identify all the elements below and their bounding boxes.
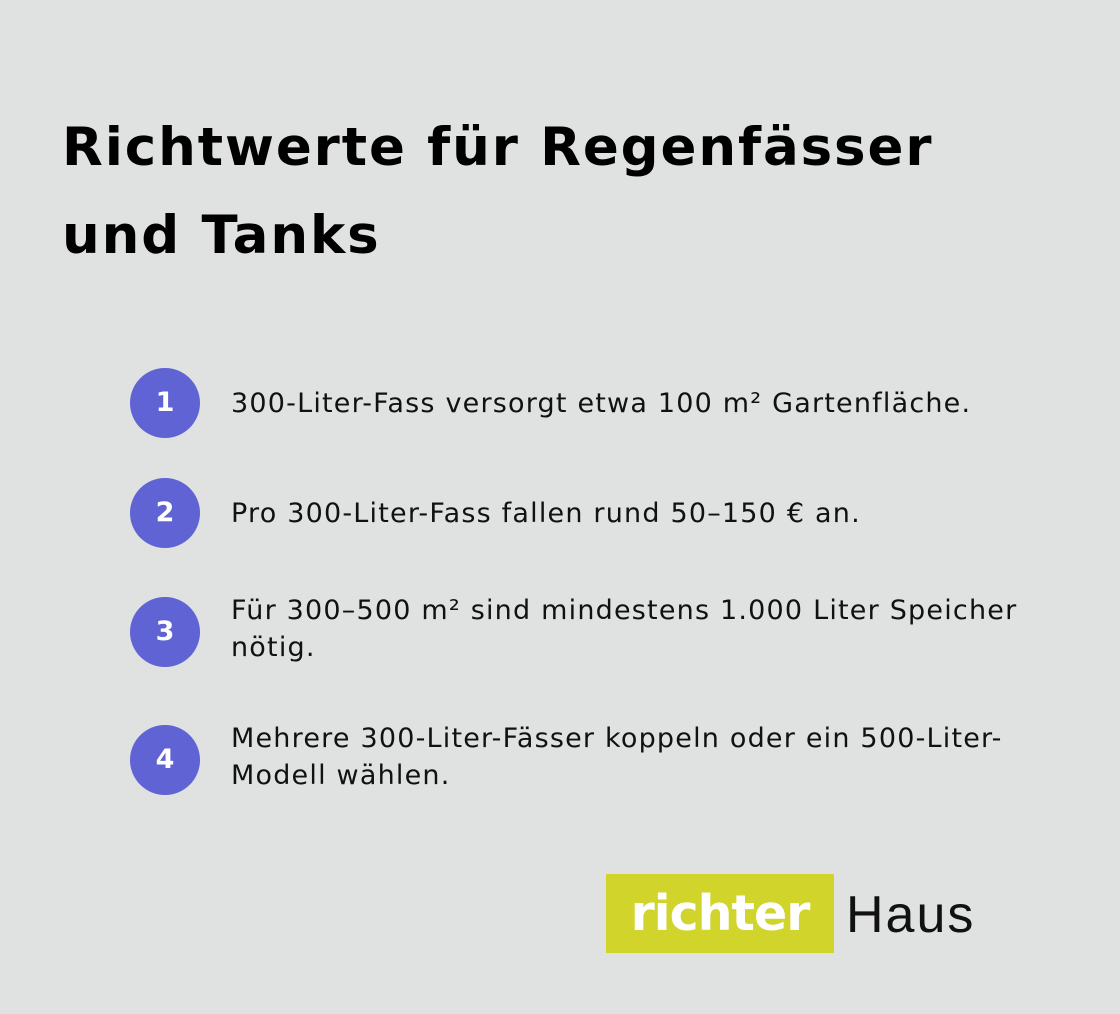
icon: number 4: 4 xyxy=(156,744,174,775)
title: Richtwerte für Regenfässer xyxy=(62,117,933,178)
icon: number 3 xyxy=(130,597,200,667)
item 2 xyxy=(130,478,861,548)
title: und Tanks xyxy=(62,205,381,266)
item 1 xyxy=(130,368,971,438)
item 3 xyxy=(130,595,1017,667)
icon: number 2: 2 xyxy=(156,497,174,528)
icon: number 4 xyxy=(130,725,200,795)
title xyxy=(62,117,933,266)
item 3: Für 300–500 m² sind mindestens 1.000 Liter Speicher xyxy=(231,595,1017,626)
item 4: Mehrere 300-Liter-Fässer koppeln oder ein 500-Liter- xyxy=(231,723,1003,754)
icon: number 2 xyxy=(130,478,200,548)
icon: number 3: 3 xyxy=(156,616,174,647)
item 4 xyxy=(130,723,1003,795)
item 2: Pro 300-Liter-Fass fallen rund 50–150 € an. xyxy=(231,498,861,529)
logo xyxy=(606,874,975,953)
item 3: nötig. xyxy=(231,632,316,663)
item 1: 300-Liter-Fass versorgt etwa 100 m² Gartenfläche. xyxy=(231,388,971,419)
icon: number 1: 1 xyxy=(156,387,174,418)
logo: Haus xyxy=(846,886,975,944)
icon: number 1 xyxy=(130,368,200,438)
logo: richter xyxy=(631,885,809,942)
item 4: Modell wählen. xyxy=(231,760,450,791)
